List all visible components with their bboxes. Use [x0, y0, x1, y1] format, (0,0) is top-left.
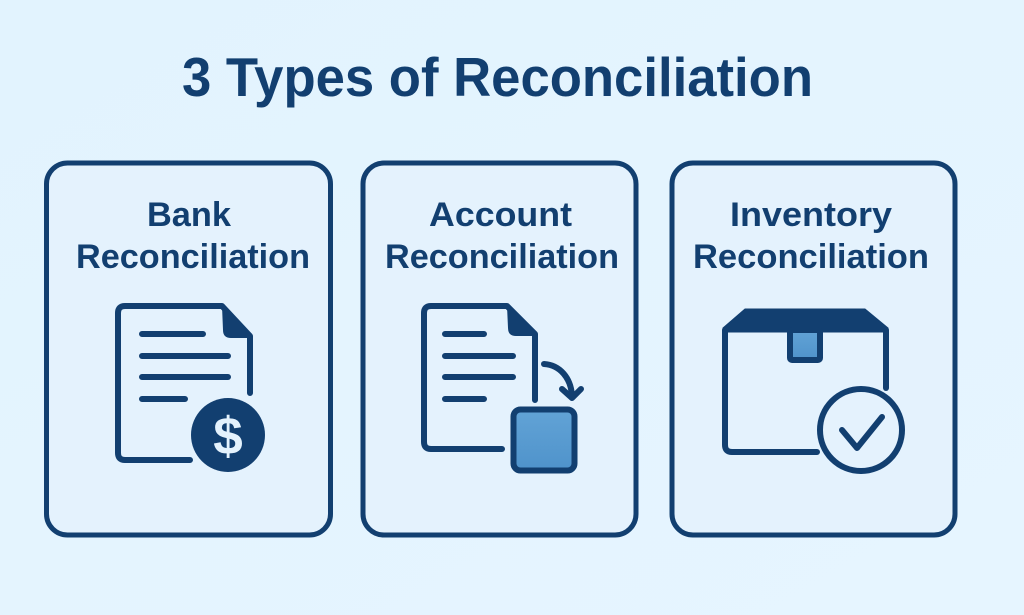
- heading: bank reconciliation: Reconciliation: [76, 238, 310, 276]
- heading: account reconciliation: Reconciliation: [385, 238, 619, 276]
- panel: bank reconciliation: [46, 163, 330, 535]
- panel: account reconciliation: [363, 163, 636, 535]
- heading: bank reconciliation: Bank: [147, 196, 231, 234]
- heading: account reconciliation: Account: [429, 196, 572, 234]
- icon: document with arrow to square: [424, 306, 581, 470]
- heading: account reconciliation: [385, 196, 619, 276]
- title: 3 Types of Reconciliation: [182, 46, 813, 108]
- heading: inventory reconciliation: Inventory: [730, 196, 892, 234]
- icon: box with check mark: [723, 309, 902, 471]
- icon: document with dollar coin: [118, 306, 265, 472]
- panel: inventory reconciliation: [672, 163, 955, 535]
- icon: document with dollar coin: $: [213, 407, 243, 466]
- heading: inventory reconciliation: Reconciliation: [693, 238, 929, 276]
- heading: inventory reconciliation: [693, 196, 929, 276]
- heading: bank reconciliation: [76, 196, 310, 276]
